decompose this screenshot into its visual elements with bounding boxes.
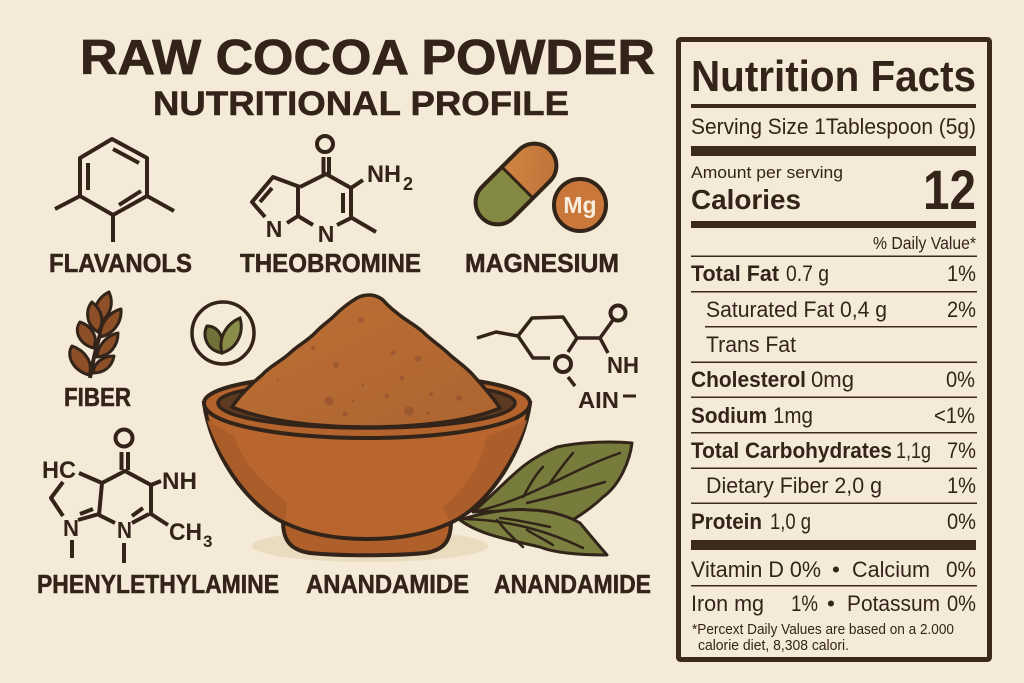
row: iron and potassium (691, 591, 976, 616)
icon: flavanols molecule (55, 139, 174, 242)
row: saturated fat: Saturated Fat 0,4 g (706, 297, 887, 322)
row: cholesterol: 0% (946, 367, 975, 392)
row: cholesterol: Cholesterol (691, 367, 806, 392)
icon: phenylethylamine molecule: CH (169, 519, 202, 546)
icon: phenylethylamine molecule: 3 (203, 532, 212, 551)
calories label: Calories (691, 184, 801, 215)
icon: theobromine molecule: N (266, 216, 282, 242)
footnote: calorie diet, 8,308 calori. (698, 638, 849, 654)
row: total carbohydrates: 1,1g (896, 438, 931, 463)
footnote: *Percext Daily Values are based on a 2.000 (692, 622, 954, 638)
row: vitamin d and calcium: Vitamin D 0% (691, 557, 821, 582)
row: sodium (691, 403, 975, 428)
icon: magnesium capsule (467, 135, 565, 233)
icon: anandamide molecule (477, 306, 639, 413)
row: sodium: Sodium (691, 403, 767, 428)
row: iron and potassium: Potassum (847, 591, 940, 616)
row: vitamin d and calcium (691, 557, 976, 582)
panel border (678, 40, 990, 660)
row: cholesterol (691, 367, 975, 392)
row: vitamin d and calcium: 0% (946, 557, 976, 582)
label: phenylethylamine: PHENYLETHYLAMINE (37, 571, 279, 599)
row: iron and potassium: 1% (791, 591, 818, 616)
icon: phenylethylamine molecule: N (63, 515, 79, 541)
row: saturated fat: 2% (947, 297, 976, 322)
row: total carbohydrates: Total Carbohydrates (691, 438, 892, 463)
label: anandamide right: ANANDAMIDE (494, 571, 651, 599)
cocoa leaves (460, 442, 632, 555)
row: sodium: <1% (934, 403, 975, 428)
row: protein: 1,0 g (770, 509, 811, 534)
footnote (692, 622, 954, 654)
label: anandamide center: ANANDAMIDE (306, 571, 469, 599)
bowl interior (218, 382, 515, 428)
row: vitamin d and calcium: Calcium (852, 557, 930, 582)
icon: magnesium coin: Mg (563, 192, 597, 218)
icon: phenylethylamine molecule: N (117, 517, 132, 543)
row: protein: 0% (947, 509, 976, 534)
illustration: bowl of cocoa powder with leaves (204, 295, 632, 562)
bowl right shade (443, 420, 527, 521)
bowl foot (283, 521, 451, 555)
heading: nutrition facts: Nutrition Facts (691, 52, 976, 101)
bowl left shade (207, 420, 287, 521)
row: dietary fiber: Dietary Fiber 2,0 g (706, 473, 882, 498)
daily value header: % Daily Value* (873, 233, 976, 253)
icon: leaf badge (192, 302, 254, 364)
row: protein (691, 509, 976, 534)
label: magnesium: MAGNESIUM (465, 250, 619, 278)
icon: phenylethylamine molecule: NH (162, 468, 197, 495)
icon: theobromine molecule (252, 136, 413, 247)
calories value: 12 (923, 158, 976, 221)
subtitle: NUTRITIONAL PROFILE (153, 85, 569, 123)
icon: phenylethylamine molecule (42, 430, 212, 563)
label: fiber: FIBER (64, 384, 131, 412)
icon: anandamide molecule: AIN (578, 387, 619, 413)
bowl body (204, 403, 530, 539)
row: dietary fiber (706, 473, 976, 498)
row: iron and potassium: 0% (947, 591, 976, 616)
bowl rim (204, 374, 530, 438)
rules (691, 104, 977, 586)
label: flavanols: FLAVANOLS (49, 250, 192, 278)
row: total fat: 0.7 g (786, 261, 829, 286)
row: total fat: Total Fat (691, 261, 779, 286)
label: theobromine: THEOBROMINE (240, 250, 421, 278)
panel: nutrition facts (678, 40, 990, 660)
icon: theobromine molecule: N (318, 221, 334, 247)
icon: theobromine molecule: 2 (403, 174, 413, 194)
row: cholesterol: 0mg (811, 367, 854, 392)
title: RAW COCOA POWDER (80, 31, 655, 85)
bowl shadow (252, 530, 488, 562)
serving size: Serving Size 1Tablespoon (5g) (691, 114, 976, 139)
row: iron and potassium: Iron mg (691, 591, 764, 616)
row: total fat (691, 261, 976, 286)
powder specks (276, 317, 462, 416)
title (80, 31, 655, 123)
row: trans fat: Trans Fat (706, 332, 797, 357)
row: vitamin d and calcium: • (832, 557, 840, 582)
icon: anandamide molecule: NH (607, 352, 639, 378)
row: total carbohydrates: 7% (947, 438, 976, 463)
row: sodium: 1mg (773, 403, 813, 428)
row: iron and potassium: • (827, 591, 835, 616)
icon: magnesium coin (554, 179, 606, 231)
icon: theobromine molecule: NH (367, 161, 401, 188)
amount per serving: Amount per serving (691, 163, 843, 182)
row: protein: Protein (691, 509, 762, 534)
row: total fat: 1% (947, 261, 976, 286)
row: dietary fiber: 1% (947, 473, 976, 498)
icon: fiber wheat sprig (70, 292, 121, 378)
icon: phenylethylamine molecule: HC (42, 457, 76, 484)
cocoa powder heap (232, 295, 500, 427)
